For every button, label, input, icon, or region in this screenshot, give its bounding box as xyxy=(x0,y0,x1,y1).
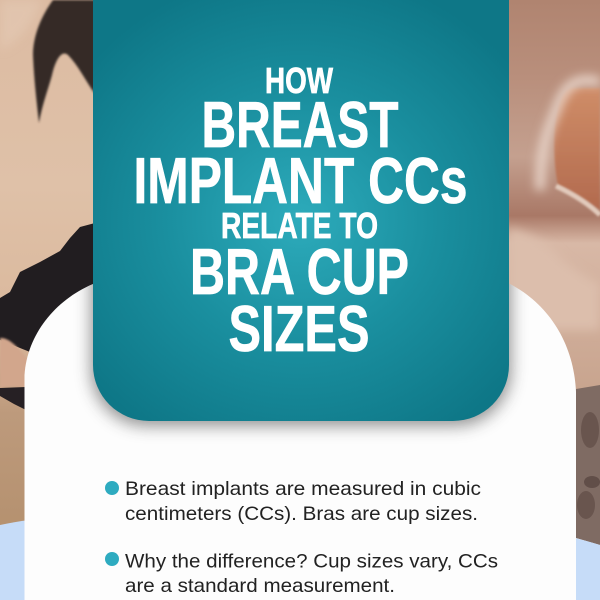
title: SIZES xyxy=(228,292,370,365)
bullet 2 xyxy=(105,550,498,597)
title: RELATE TO xyxy=(221,205,378,246)
hair xyxy=(33,0,95,123)
black lace bra xyxy=(0,223,95,352)
lace fabric xyxy=(576,385,600,545)
highlight along arm fold xyxy=(540,80,600,190)
bullet 2: Why the difference? Cup sizes vary, CCs xyxy=(125,550,498,572)
hand xyxy=(0,338,28,388)
title: IMPLANT CCs xyxy=(134,144,468,217)
photo: left side, skin, hair, lace bra and hand xyxy=(0,0,100,530)
title xyxy=(134,60,468,365)
bullet 1 xyxy=(105,478,481,525)
teal title panel xyxy=(93,0,509,421)
lace below hand xyxy=(0,387,26,410)
photo: right side, shoulder and underarm with lace xyxy=(505,0,600,545)
title: BREAST xyxy=(202,88,398,161)
arm folds xyxy=(508,228,600,330)
title: BRA CUP xyxy=(190,235,409,308)
title: HOW xyxy=(265,60,333,101)
armpit hollow xyxy=(554,88,600,210)
teal title panel shadow xyxy=(80,284,522,437)
light blue bottom band xyxy=(0,520,600,600)
bullet 1: Breast implants are measured in cubic xyxy=(125,478,481,500)
bullet 2: are a standard measurement. xyxy=(125,575,395,597)
bullet list xyxy=(105,478,498,597)
white content panel xyxy=(24,284,576,600)
bullet 1: centimeters (CCs). Bras are cup sizes. xyxy=(125,503,478,525)
